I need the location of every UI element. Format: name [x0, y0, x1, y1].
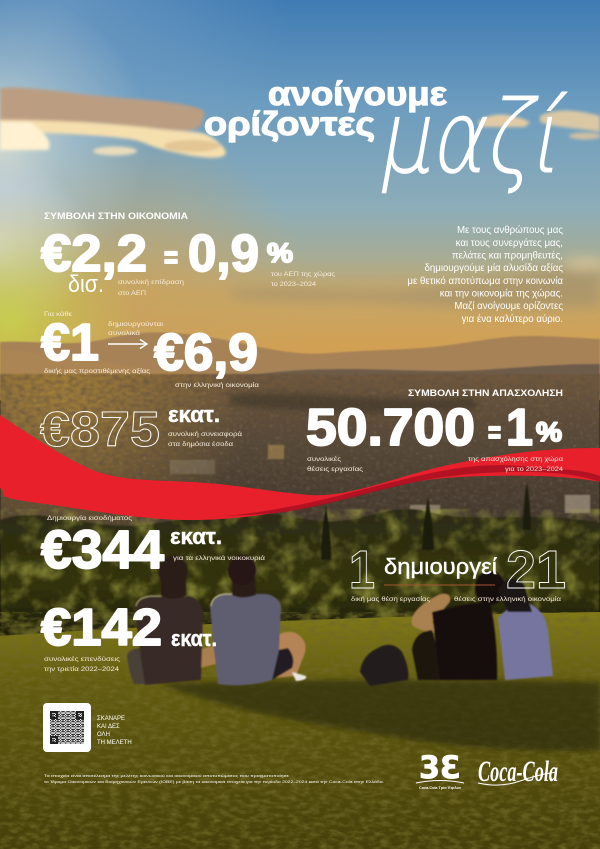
QR caption: ΟΛΗ	[97, 732, 110, 738]
stat: public revenue: στα δημόσια έσοδα	[168, 440, 233, 448]
logo: Coca-Cola	[478, 755, 558, 788]
intro paragraph	[407, 225, 563, 325]
stat: public revenue	[40, 402, 242, 457]
stat: jobs: 50.700	[306, 399, 475, 457]
background: city	[0, 374, 600, 544]
stat: job multiplier	[349, 540, 566, 603]
footnote: το Ίδρυμα Οικονομικών και Βιομηχανικών Ερευνών (ΙΟΒΕ) με βάση τα οικονομικά στοιχεία για την περίοδο 2022–2024 κατά την Coca-Cola στην Ελλάδα.	[44, 779, 384, 784]
stat: multiplier	[41, 310, 259, 389]
stat: public revenue: συνολική συνεισφορά	[168, 430, 242, 438]
background: grass	[0, 612, 600, 849]
intro paragraph: πελάτες και προμηθευτές,	[452, 250, 563, 262]
stat: public revenue: εκατ.	[168, 402, 220, 427]
stat: investments: την τριετία 2022–2024	[44, 665, 120, 673]
stat: jobs	[306, 399, 564, 473]
stat: multiplier: δικής μας προστιθέμενης αξίας	[44, 367, 150, 375]
stat: job multiplier: 1	[349, 540, 375, 600]
stat: multiplier: €6,9	[154, 324, 258, 382]
background: treeline	[0, 482, 600, 640]
stat: jobs: 1	[506, 399, 533, 457]
people: two men sitting on the left	[127, 555, 306, 685]
stat: household income: εκατ.	[170, 524, 222, 549]
stat: jobs: %	[536, 417, 562, 447]
logo: 3E: 3Ɛ	[419, 750, 461, 786]
arrow	[108, 340, 147, 348]
intro paragraph: και τους συνεργάτες μας,	[456, 238, 563, 249]
background: sunset sky	[0, 0, 600, 400]
footnote: Τα στοιχεία είναι αποτέλεσμα της μελέτης κοινωνικού και οικονομικού αποτυπώματος που πραγματοποίησε	[44, 773, 289, 778]
stat: multiplier: δημιουργούνται	[108, 320, 164, 328]
intro paragraph: Μαζί ανοίγουμε ορίζοντες	[454, 301, 563, 312]
intro paragraph: Με τους ανθρώπους μας	[457, 225, 563, 236]
stat: investments	[41, 599, 217, 673]
stat: job multiplier: 21	[506, 540, 566, 600]
stat: GDP impact: του ΑΕΠ της χώρας	[271, 270, 335, 278]
heading: contribution to the economy: ΣΥΜΒΟΛΗ ΣΤΗΝ ΟΙΚΟΝΟΜΙΑ	[44, 211, 189, 221]
footnote	[44, 773, 384, 784]
stat: GDP impact	[41, 225, 335, 298]
QR caption: ΣΚΑΝΑΡΕ	[97, 716, 125, 722]
heading: contribution to employment: ΣΥΜΒΟΛΗ ΣΤΗΝ ΑΠΑΣΧΟΛΗΣΗ	[408, 388, 563, 398]
title	[204, 75, 577, 196]
background: mountains	[0, 332, 600, 400]
title: ορίζοντες	[204, 105, 375, 142]
stat: household income: για τα ελληνικά νοικοκυριά	[173, 554, 265, 562]
stat: investments: συνολικές επενδύσεις	[44, 655, 120, 663]
stat: investments: €142	[41, 599, 162, 657]
stat: multiplier: στην ελληνική οικονομία	[175, 381, 259, 389]
stat: household income	[41, 514, 265, 580]
QR caption	[97, 716, 132, 746]
intro paragraph: δημιουργούμε μία αλυσίδα αξίας	[424, 263, 563, 274]
stat: GDP impact: %	[267, 238, 293, 268]
stat: GDP impact: το 2023–2024	[271, 281, 316, 288]
title: ανοίγουμε	[268, 75, 447, 112]
stat: jobs: =	[488, 416, 501, 449]
stat: jobs: συνολικές	[307, 455, 341, 463]
stat: public revenue: €875	[40, 403, 160, 457]
stat: jobs: θέσεις εργασίας	[307, 465, 363, 473]
stat: jobs: για το 2023–2024	[505, 466, 564, 473]
QR caption: ΤΗ ΜΕΛΕΤΗ	[97, 740, 132, 746]
stat: GDP impact: €2,2	[41, 225, 147, 283]
stat: multiplier: Για κάθε	[44, 310, 72, 318]
background: clouds	[0, 88, 600, 308]
stat: GDP impact: δισ.	[68, 271, 104, 298]
stat: job multiplier: θέσεις στην ελληνική οικονομία	[454, 595, 561, 603]
stat: GDP impact: =	[164, 241, 178, 274]
stat: job multiplier: δική μας θέση εργασίας	[351, 595, 430, 603]
stat: jobs: της απασχόλησης στη χώρα	[468, 455, 563, 463]
stat: multiplier: €1	[41, 314, 99, 372]
QR caption: ΚΑΙ ΔΕΣ	[97, 724, 120, 730]
QR code	[43, 703, 91, 752]
people: couple and backpack on the right	[360, 571, 553, 686]
red wave	[0, 415, 600, 520]
stat: multiplier: συνολικά	[108, 329, 140, 337]
stat: household income: Δημιουργία εισοδήματος	[47, 514, 132, 522]
stat: household income: €344	[41, 520, 164, 580]
stat: job multiplier: δημιουργεί	[384, 554, 497, 579]
stat: GDP impact: συνολική επίδραση	[118, 278, 185, 286]
intro paragraph: για ένα καλύτερο αύριο.	[462, 314, 563, 325]
intro paragraph: και την οικονομία της χώρας.	[440, 288, 563, 300]
logo: 3E: Coca-Cola Τρία Έψιλον	[419, 786, 461, 790]
stat: investments: εκατ.	[171, 626, 217, 651]
intro paragraph: με θετικό αποτύπωμα στην κοινωνία	[407, 276, 563, 287]
stat: GDP impact: 0,9	[188, 225, 259, 283]
stat: GDP impact: στο ΑΕΠ	[118, 290, 146, 297]
